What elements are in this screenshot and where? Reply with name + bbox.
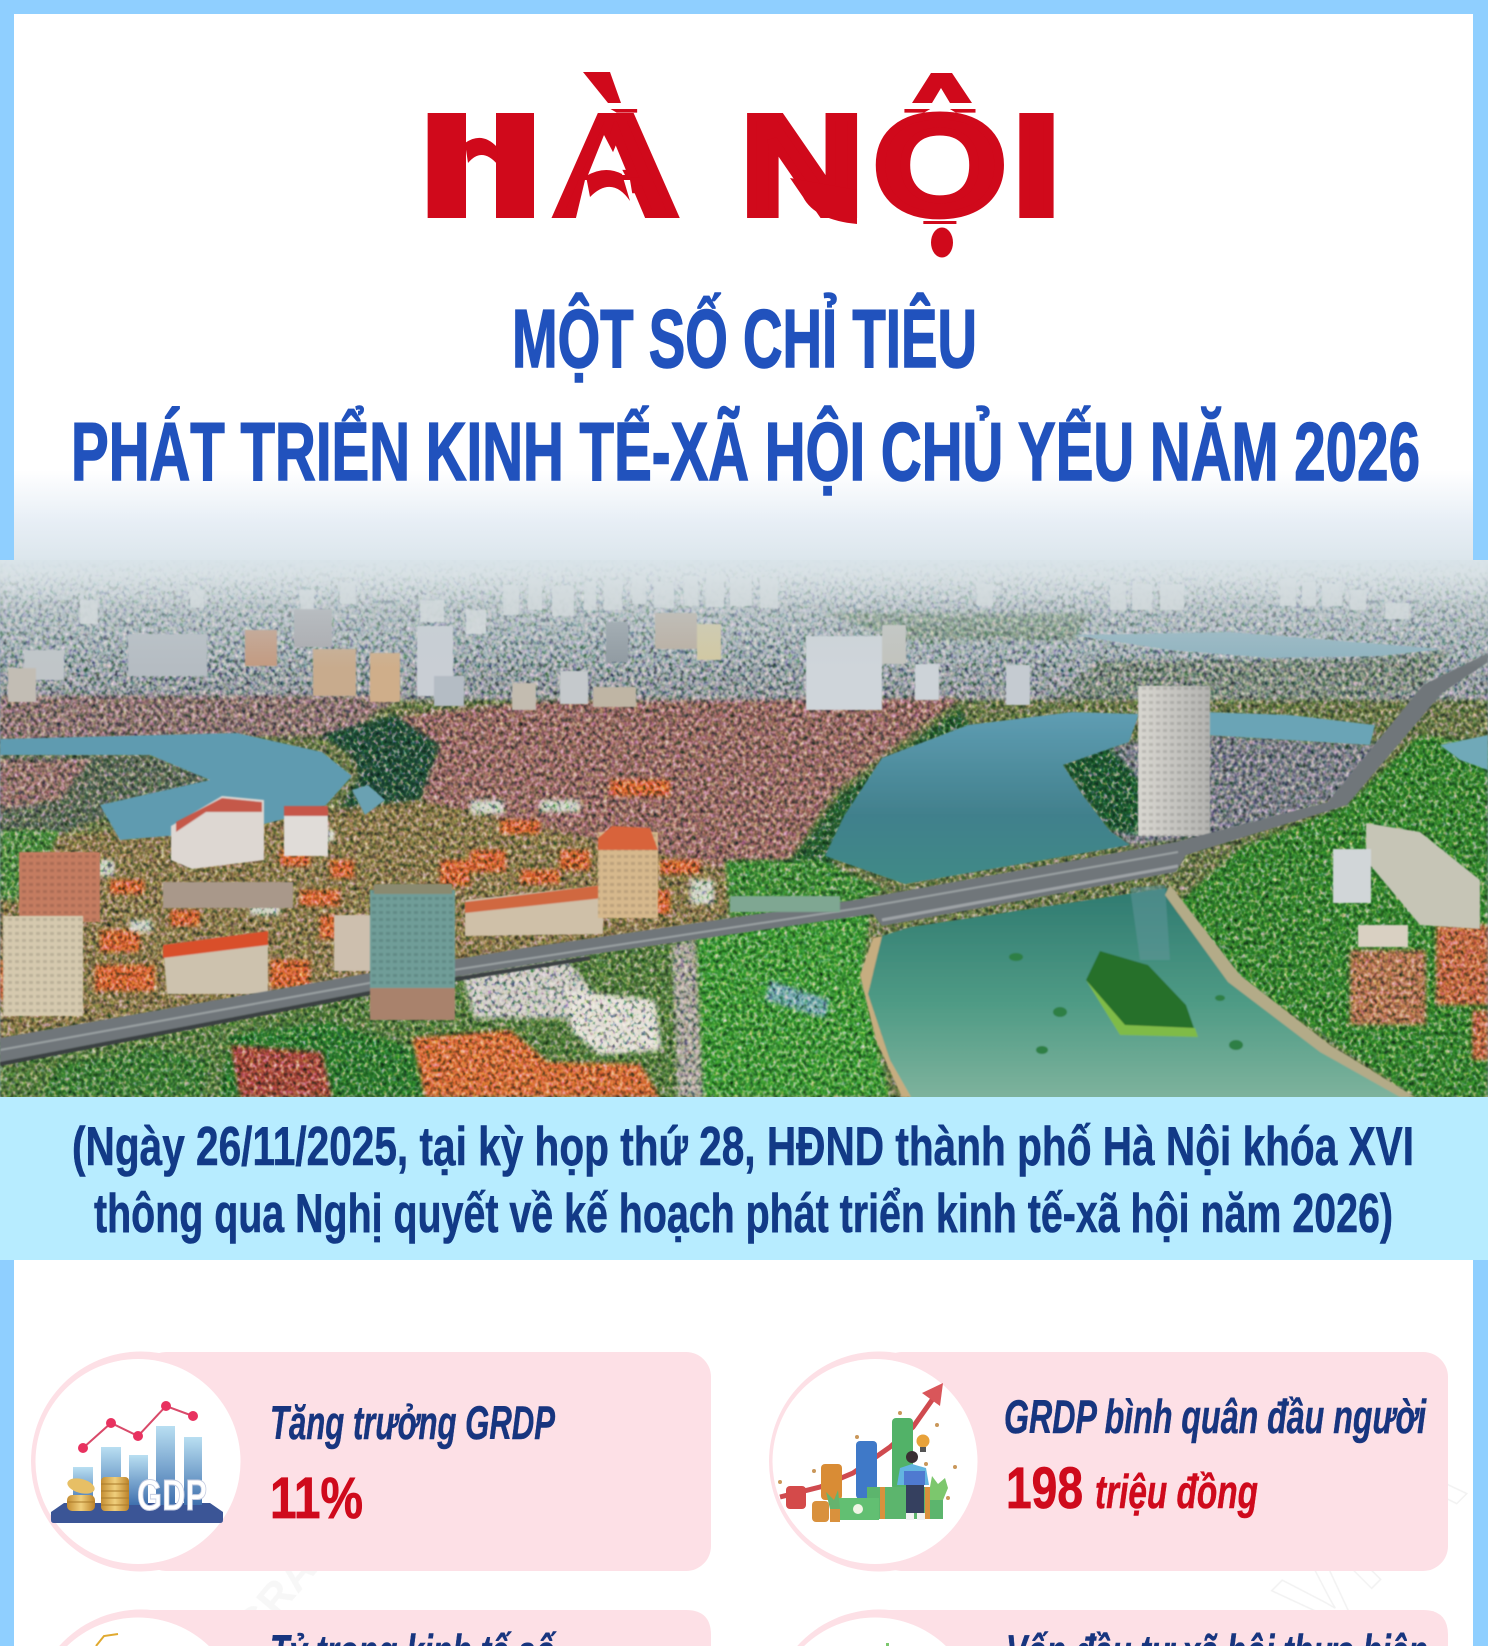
- watermarks: [225, 1428, 1484, 1646]
- lake shores: [1165, 885, 1415, 1097]
- left island roofs: [0, 756, 208, 834]
- orange roof clusters: [0, 780, 700, 1000]
- left neighbourhood base: [0, 800, 780, 1050]
- foreground towers: [370, 826, 840, 1020]
- icon: plant fragment: [886, 1643, 889, 1646]
- icon: chart fragment: [96, 1634, 118, 1646]
- upper-left lake: [0, 733, 352, 840]
- bottom green park: [697, 905, 890, 1097]
- subtitle: [71, 292, 1420, 498]
- roofs, central district: [400, 698, 960, 880]
- main title: HÀ NỘI: [421, 87, 1060, 245]
- info band: [0, 1097, 1488, 1260]
- islet: [1086, 951, 1195, 1031]
- upper right lake: [825, 712, 1139, 884]
- card text: 11%: [270, 1466, 363, 1531]
- elevated highway: [0, 653, 1488, 1064]
- icon: growth chart with person: [778, 1383, 957, 1522]
- district east of upper lake: [1110, 735, 1380, 847]
- horizon haze: [0, 558, 1488, 668]
- far skyline: [80, 575, 1409, 634]
- icon: GDP chart with coins: GDP: [137, 1471, 207, 1520]
- trees lining upper right lake: [790, 708, 970, 872]
- card: digital economy share: [59, 1610, 711, 1646]
- hazy sky fade: [14, 470, 1473, 570]
- card text: [1004, 1390, 1427, 1521]
- card text: [270, 1396, 555, 1531]
- towers and buildings: [3, 575, 1480, 1016]
- textured land: [0, 556, 1488, 1100]
- right bank buildings: [1366, 823, 1480, 929]
- water: [0, 632, 1488, 1100]
- lily patches: [1009, 953, 1243, 1054]
- card: GRDP per capita: [769, 1352, 1448, 1572]
- card text: 198: [1006, 1456, 1083, 1521]
- icon: GDP chart with coins: [51, 1401, 223, 1523]
- subtitle: MỘT SỐ CHỈ TIÊU: [512, 292, 977, 385]
- dark trees by lake: [320, 713, 442, 810]
- watermarks: GRAPHICS: [225, 1442, 412, 1646]
- card: GRDP growth: [31, 1352, 711, 1572]
- band text: [72, 1115, 1414, 1244]
- tall white tower by lake: [1138, 686, 1210, 836]
- far pond: [1072, 632, 1442, 658]
- card text: Tăng trưởng GRDP: [270, 1396, 555, 1449]
- left buildings: [171, 796, 264, 869]
- bottom features: [219, 1020, 426, 1097]
- card text: triệu đồng: [1095, 1465, 1258, 1518]
- card: social investment: [797, 1610, 1448, 1646]
- aerial photo of Hanoi: [0, 556, 1488, 1100]
- lower lake: [868, 888, 1414, 1100]
- right bank trees: [1176, 735, 1488, 1097]
